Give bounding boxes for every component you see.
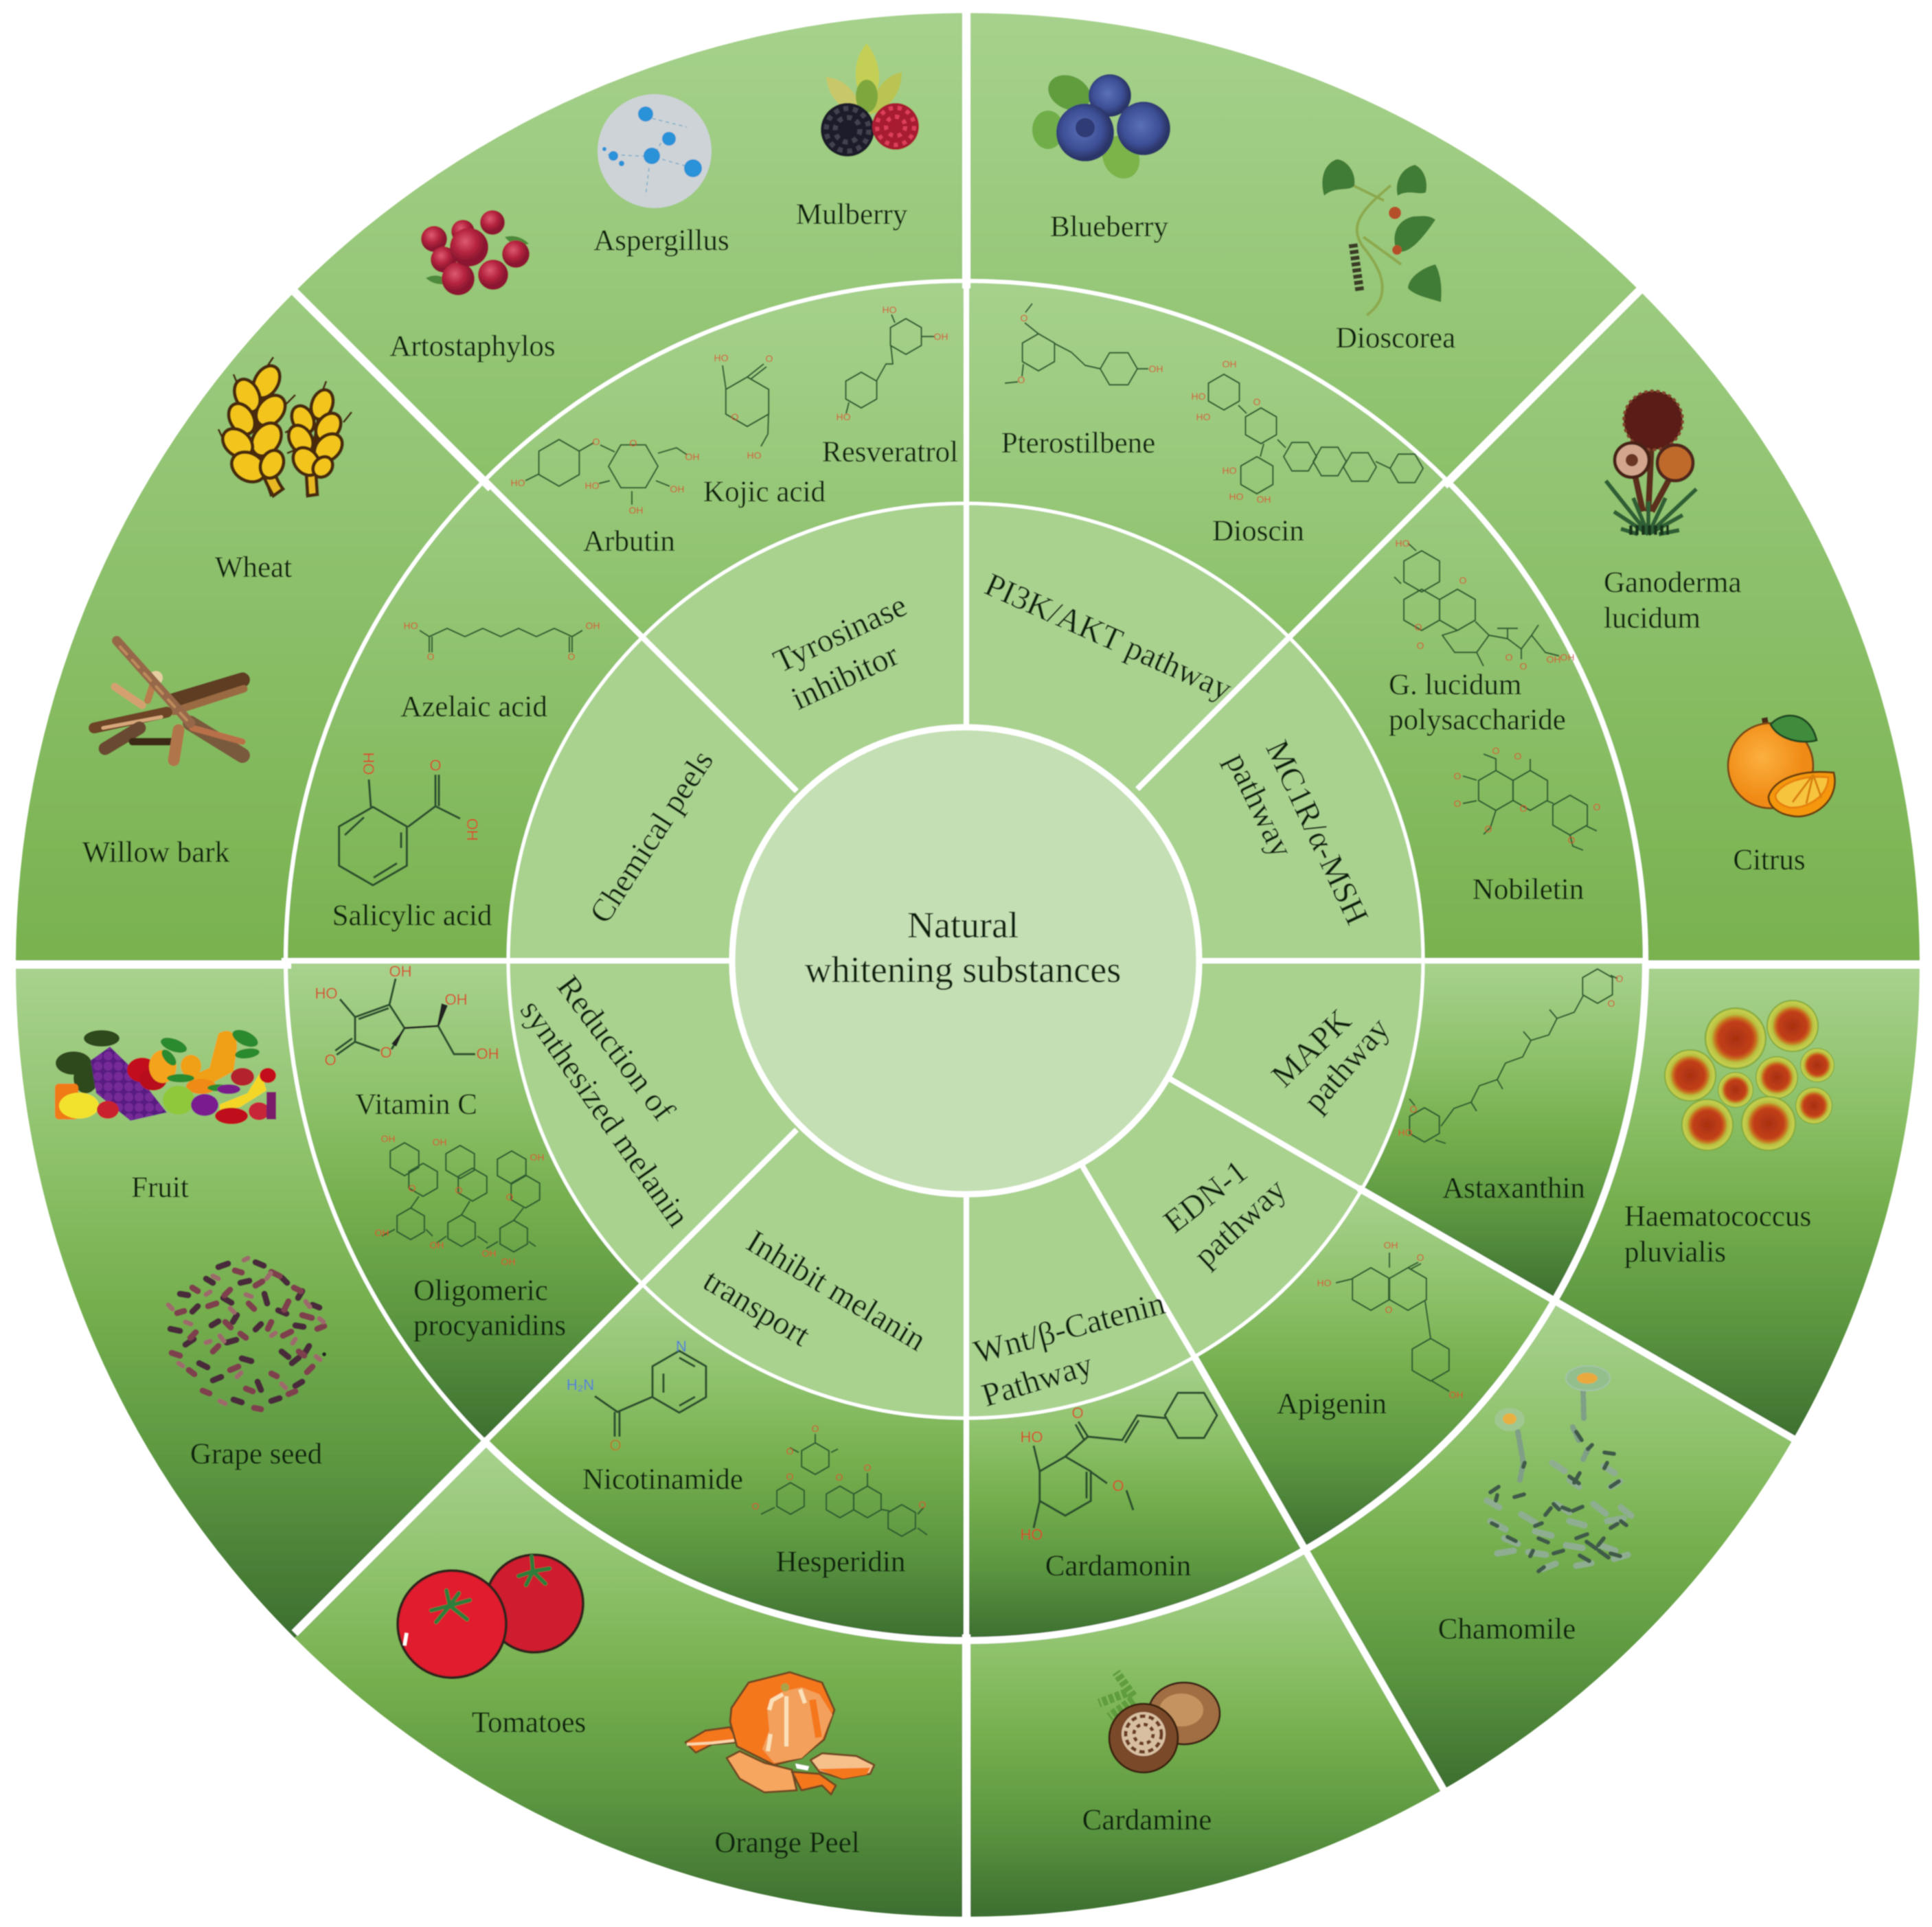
label: Cardamine: Cardamine bbox=[1082, 1804, 1212, 1836]
label: Cardamonin: Cardamonin bbox=[1045, 1550, 1191, 1582]
icon: willow bark bbox=[94, 641, 244, 760]
structure: Dioscin: O bbox=[1253, 396, 1261, 407]
mechanism label: Wnt/β-Catenin Pathway: Pathway bbox=[977, 1346, 1097, 1414]
structure: Kojic acid: O bbox=[766, 353, 773, 364]
label: Orange Peel: Orange Peel bbox=[714, 1827, 860, 1859]
mechanism label: Wnt/β-Catenin Pathway: Wnt/β-Catenin bbox=[970, 1285, 1169, 1371]
label: Salicylic acid: Salicylic acid bbox=[332, 900, 492, 932]
structure: Arbutin: OH bbox=[685, 451, 699, 462]
icon: artostaphylos berries bbox=[421, 210, 530, 295]
center circle bbox=[732, 727, 1199, 1194]
label: Fruit: Fruit bbox=[131, 1172, 189, 1204]
sector: Astaxanthin bbox=[1359, 961, 1645, 1301]
mechanism label: Inhibit melanin transport: Inhibit melanin bbox=[740, 1223, 933, 1358]
sector: Ganoderma and Citrus bbox=[1446, 292, 1920, 965]
mechanism label: Chemical peels: Chemical peels bbox=[582, 744, 720, 930]
icon: aspergillus colony plate bbox=[598, 94, 712, 208]
structure: Azelaic acid: HO bbox=[404, 620, 418, 631]
structure: Arbutin: OH bbox=[629, 505, 643, 516]
icon: chamomile bbox=[1487, 1366, 1631, 1571]
sector: Nicotinamide and Hesperidin bbox=[486, 1281, 966, 1640]
icon: grape seed bbox=[168, 1258, 326, 1409]
label: Nicotinamide: Nicotinamide bbox=[582, 1463, 743, 1496]
structure: Nobiletin: O bbox=[1454, 798, 1462, 809]
structure: Dioscin: HO bbox=[1196, 411, 1211, 422]
label: Blueberry: Blueberry bbox=[1050, 211, 1168, 243]
sector: Arbutin, Kojic acid, Resveratrol bbox=[486, 282, 966, 640]
structure: Hesperidin: O bbox=[919, 1499, 927, 1510]
structure: Dioscin: HO bbox=[1229, 491, 1244, 502]
structure: Cardamonin: O bbox=[1071, 1404, 1084, 1422]
inner ring: mechanisms background bbox=[508, 503, 1423, 1418]
structure: Oligomeric procyanidins: OH bbox=[433, 1137, 446, 1148]
structure: Oligomeric procyanidins: OH bbox=[380, 1133, 396, 1144]
structure: G. lucidum triterpene: O bbox=[1520, 661, 1527, 672]
structure: Apigenin: OH bbox=[1383, 1240, 1398, 1251]
structure: Cardamonin: O bbox=[1112, 1477, 1124, 1494]
structure: Vitamin C: HO bbox=[315, 985, 338, 1002]
structure: Vitamin C: O bbox=[324, 1051, 337, 1069]
label: Oligomeric procyanidins bbox=[413, 1275, 566, 1342]
label: Vitamin C: Vitamin C bbox=[355, 1088, 477, 1121]
structure: Nobiletin: O bbox=[1520, 803, 1527, 814]
label: G. lucidum polysaccharide: G. lucidum bbox=[1389, 669, 1521, 701]
label: Ganoderma lucidum: Ganoderma bbox=[1604, 567, 1742, 599]
structure: Hesperidin: O bbox=[786, 1446, 794, 1457]
icon: fruit pile bbox=[55, 1026, 276, 1124]
icon: citrus bbox=[1728, 716, 1835, 817]
structure: Nobiletin: O bbox=[1485, 823, 1492, 834]
structure: Arbutin: O bbox=[630, 437, 637, 448]
label: G. lucidum polysaccharide bbox=[1389, 669, 1566, 736]
mechanism label: MAPK pathway: pathway bbox=[1296, 1011, 1397, 1119]
icon: blueberry bbox=[1032, 69, 1170, 185]
mechanism label: Tyrosinase inhibitor: inhibitor bbox=[786, 636, 904, 717]
structure: Astaxanthin: HO bbox=[1398, 1127, 1413, 1138]
structure: Oligomeric procyanidins: O bbox=[455, 1185, 463, 1196]
structure: Oligomeric procyanidins: O bbox=[409, 1183, 416, 1194]
mechanism label: PI3K/AKT pathway: PI3K/AKT pathway bbox=[979, 567, 1237, 707]
sector: Cardamine bbox=[968, 1551, 1444, 1917]
label: Azelaic acid: Azelaic acid bbox=[400, 691, 547, 723]
sector: Artostaphylos, Aspergillus, Mulberry bbox=[295, 13, 968, 486]
structure: Apigenin: OH bbox=[1449, 1389, 1463, 1400]
label: Citrus: Citrus bbox=[1733, 844, 1806, 876]
structure: Apigenin bbox=[1317, 1240, 1463, 1400]
structure: Azelaic acid: O bbox=[427, 651, 435, 662]
structure: Oligomeric procyanidins: OH bbox=[501, 1256, 515, 1267]
label: Haematococcus pluvialis: pluvialis bbox=[1624, 1236, 1726, 1268]
structure: G. lucidum triterpene: HO bbox=[1396, 538, 1410, 549]
structure: Hesperidin bbox=[752, 1423, 927, 1536]
structure: Salicylic acid: HO bbox=[360, 753, 377, 775]
label: Ganoderma lucidum: lucidum bbox=[1604, 602, 1701, 635]
structure: Azelaic acid: OH bbox=[585, 620, 600, 631]
structure: Dioscin: OH bbox=[1257, 494, 1271, 505]
structure: Oligomeric procyanidins: OH bbox=[375, 1227, 389, 1238]
sector: Tomatoes and Orange Peel bbox=[295, 1444, 968, 1917]
sector: Cardamonin bbox=[966, 1354, 1305, 1640]
mechanism label: Reduction of synthesized melanin: Reduction of bbox=[549, 969, 682, 1128]
label: Apigenin: Apigenin bbox=[1277, 1388, 1387, 1420]
label: Resveratrol: Resveratrol bbox=[822, 436, 958, 468]
mechanism label: Inhibit melanin transport: transport bbox=[697, 1262, 817, 1354]
structure: Dioscin bbox=[1191, 358, 1427, 505]
structure: Hesperidin: O bbox=[786, 1471, 794, 1482]
structure: Apigenin: O bbox=[1417, 1252, 1424, 1263]
title: Natural whitening substances bbox=[805, 904, 1121, 990]
mechanism label: Reduction of synthesized melanin: synthesized melanin bbox=[513, 993, 696, 1233]
structure: G. lucidum triterpene: O bbox=[1459, 575, 1467, 586]
structure: Vitamin C bbox=[315, 963, 499, 1069]
structure: Salicylic acid: O bbox=[429, 757, 442, 774]
structure: Astaxanthin bbox=[1398, 969, 1624, 1143]
structure: Dioscin: HO bbox=[1191, 391, 1206, 402]
mechanism label: MC1R/α-MSH pathway: pathway bbox=[1218, 747, 1300, 863]
mechanism label: EDN-1 pathway: pathway bbox=[1187, 1172, 1293, 1274]
structure: G. lucidum triterpene: O bbox=[1417, 640, 1424, 651]
sector: Wheat and Willow bark bbox=[16, 292, 489, 965]
label: Wheat: Wheat bbox=[215, 551, 292, 584]
label: Aspergillus: Aspergillus bbox=[593, 225, 729, 257]
structure: G. lucidum triterpene: O bbox=[1505, 652, 1513, 663]
mechanism label: Tyrosinase inhibitor: Tyrosinase bbox=[768, 587, 912, 680]
structure: Salicylic acid bbox=[339, 753, 481, 885]
structure: Vitamin C: OH bbox=[389, 963, 412, 980]
structure: Azelaic acid: O bbox=[568, 651, 576, 662]
structure: Hesperidin: O bbox=[812, 1423, 819, 1434]
structure: Pterostilbene: OH bbox=[1148, 363, 1163, 374]
sector: Vitamin C and procyanidins bbox=[286, 961, 645, 1441]
structure: Nobiletin: O bbox=[1568, 834, 1576, 845]
structure: Resveratrol: HO bbox=[882, 304, 897, 315]
structure: Hesperidin: O bbox=[864, 1462, 872, 1473]
structure: Dioscin: OH bbox=[1223, 358, 1236, 369]
label: Nobiletin: Nobiletin bbox=[1473, 874, 1584, 906]
icon: haematococcus cells bbox=[1664, 1000, 1834, 1151]
structure: Nobiletin: O bbox=[1454, 771, 1462, 782]
structure: Nobiletin: O bbox=[1593, 801, 1601, 812]
icon: mulberry bbox=[821, 43, 919, 157]
structure: Pterostilbene bbox=[1005, 304, 1163, 393]
structure: Hesperidin: O bbox=[752, 1501, 760, 1512]
structure: Resveratrol bbox=[837, 304, 948, 422]
icon: dioscorea vine bbox=[1322, 159, 1442, 315]
structure: Oligomeric procyanidins bbox=[375, 1133, 544, 1267]
structure: Apigenin: HO bbox=[1317, 1277, 1332, 1288]
label: Arbutin: Arbutin bbox=[583, 525, 675, 558]
label: Haematococcus pluvialis bbox=[1624, 1200, 1811, 1268]
structure: Vitamin C: OH bbox=[477, 1045, 499, 1062]
structure: Vitamin C: OH bbox=[445, 991, 467, 1008]
label: Grape seed: Grape seed bbox=[190, 1438, 322, 1470]
sector: Apigenin bbox=[1192, 1187, 1554, 1549]
structure: Vitamin C: O bbox=[380, 1044, 392, 1061]
structure: Cardamonin: HO bbox=[1021, 1428, 1043, 1446]
structure: Resveratrol: OH bbox=[934, 331, 948, 342]
icon: tomatoes bbox=[398, 1555, 583, 1678]
icon: orange peel bbox=[685, 1672, 874, 1794]
sector: G. lucidum polysaccharide and Nobiletin bbox=[1286, 481, 1645, 961]
structure: Arbutin: O bbox=[593, 436, 600, 447]
structure: Dioscin: HO bbox=[1223, 465, 1237, 476]
middle ring: active compounds bbox=[286, 282, 1645, 1640]
mechanism label: MC1R/α-MSH pathway: MC1R/α-MSH bbox=[1258, 735, 1376, 930]
structure: Cardamonin bbox=[1021, 1382, 1223, 1543]
structure: Oligomeric procyanidins: OH bbox=[530, 1152, 544, 1163]
structure: Astaxanthin: O bbox=[1616, 973, 1624, 984]
structure: Astaxanthin: O bbox=[1410, 1104, 1418, 1115]
mechanism label: MAPK pathway: MAPK bbox=[1264, 1002, 1359, 1095]
label: Dioscorea: Dioscorea bbox=[1336, 322, 1455, 354]
structure: Kojic acid bbox=[714, 352, 773, 461]
structure: G. lucidum triterpene bbox=[1394, 538, 1574, 672]
structure: Kojic acid: HO bbox=[714, 352, 729, 363]
structure: Nicotinamide: N bbox=[676, 1338, 687, 1355]
sector: Fruit and Grape seed bbox=[16, 965, 489, 1638]
title: Natural whitening substances: Natural bbox=[907, 904, 1019, 946]
structure: Pterostilbene: O bbox=[1021, 312, 1028, 323]
mechanism label: EDN-1 pathway: EDN-1 bbox=[1157, 1153, 1254, 1240]
title: Natural whitening substances: whitening substances bbox=[805, 949, 1121, 990]
sector: Haematococcus bbox=[1554, 965, 1920, 1441]
structure: Salicylic acid: OH bbox=[464, 819, 481, 841]
structure: Arbutin: HO bbox=[511, 477, 525, 488]
structure: Arbutin bbox=[511, 434, 699, 516]
structure: G. lucidum triterpene: O bbox=[1415, 622, 1422, 632]
label: Mulberry: Mulberry bbox=[796, 198, 908, 231]
structure: Oligomeric procyanidins: OH bbox=[430, 1240, 444, 1251]
structure: G. lucidum triterpene: OH bbox=[1547, 654, 1560, 665]
structure: Nobiletin: O bbox=[1492, 745, 1500, 756]
label: Haematococcus pluvialis: Haematococcus bbox=[1624, 1200, 1811, 1233]
structure: Nicotinamide: H₂N bbox=[567, 1376, 594, 1393]
label: Kojic acid: Kojic acid bbox=[703, 476, 826, 508]
structure: Nobiletin bbox=[1454, 745, 1601, 850]
structure: Nicotinamide bbox=[567, 1338, 706, 1454]
sector: Blueberry and Dioscorea bbox=[968, 13, 1641, 486]
structure: Oligomeric procyanidins: O bbox=[506, 1191, 514, 1202]
structure: Nobiletin: O bbox=[1514, 751, 1522, 762]
label: Chamomile: Chamomile bbox=[1438, 1613, 1576, 1645]
structure: Cardamonin: HO bbox=[1021, 1526, 1043, 1543]
structure: Kojic acid: HO bbox=[747, 450, 762, 461]
structure: Kojic acid: O bbox=[731, 411, 739, 422]
structure: Azelaic acid bbox=[404, 620, 600, 662]
label: Artostaphylos: Artostaphylos bbox=[389, 330, 556, 363]
structure: Hesperidin: O bbox=[836, 1472, 843, 1483]
sector: Pterostilbene and Dioscin bbox=[966, 282, 1446, 640]
mechanism label: EDN-1 pathway bbox=[1157, 1153, 1293, 1274]
structure: Nicotinamide: O bbox=[609, 1437, 622, 1454]
label: Tomatoes: Tomatoes bbox=[472, 1707, 586, 1739]
label: Astaxanthin: Astaxanthin bbox=[1442, 1172, 1585, 1205]
label: Oligomeric procyanidins: Oligomeric bbox=[413, 1275, 548, 1307]
structure: Resveratrol: HO bbox=[837, 411, 851, 422]
icon: cardamine nuts bbox=[1099, 1672, 1220, 1772]
label: Willow bark: Willow bark bbox=[82, 836, 230, 869]
structure: Arbutin: OH bbox=[670, 483, 684, 494]
label: Hesperidin: Hesperidin bbox=[776, 1546, 905, 1578]
structure: Apigenin: O bbox=[1385, 1304, 1393, 1315]
structure: Pterostilbene: O bbox=[1018, 374, 1025, 385]
label: Pterostilbene: Pterostilbene bbox=[1001, 427, 1155, 459]
sector: Azelaic and Salicylic acid bbox=[286, 481, 645, 961]
mechanism label: Wnt/β-Catenin Pathway bbox=[970, 1285, 1169, 1414]
icon: ganoderma lucidum bbox=[1606, 391, 1696, 534]
label: Ganoderma lucidum bbox=[1604, 567, 1742, 635]
label: Oligomeric procyanidins: procyanidins bbox=[413, 1310, 566, 1342]
label: G. lucidum polysaccharide: polysaccharide bbox=[1389, 704, 1566, 736]
structure: Oligomeric procyanidins: OH bbox=[482, 1248, 496, 1259]
structure: Astaxanthin: O bbox=[1608, 998, 1615, 1009]
sector: Chamomile bbox=[1306, 1303, 1792, 1789]
structure: Arbutin: HO bbox=[585, 480, 600, 491]
label: Dioscin: Dioscin bbox=[1212, 515, 1304, 547]
icon: wheat bbox=[217, 357, 352, 496]
structure: G. lucidum triterpene: OH bbox=[1560, 652, 1574, 663]
